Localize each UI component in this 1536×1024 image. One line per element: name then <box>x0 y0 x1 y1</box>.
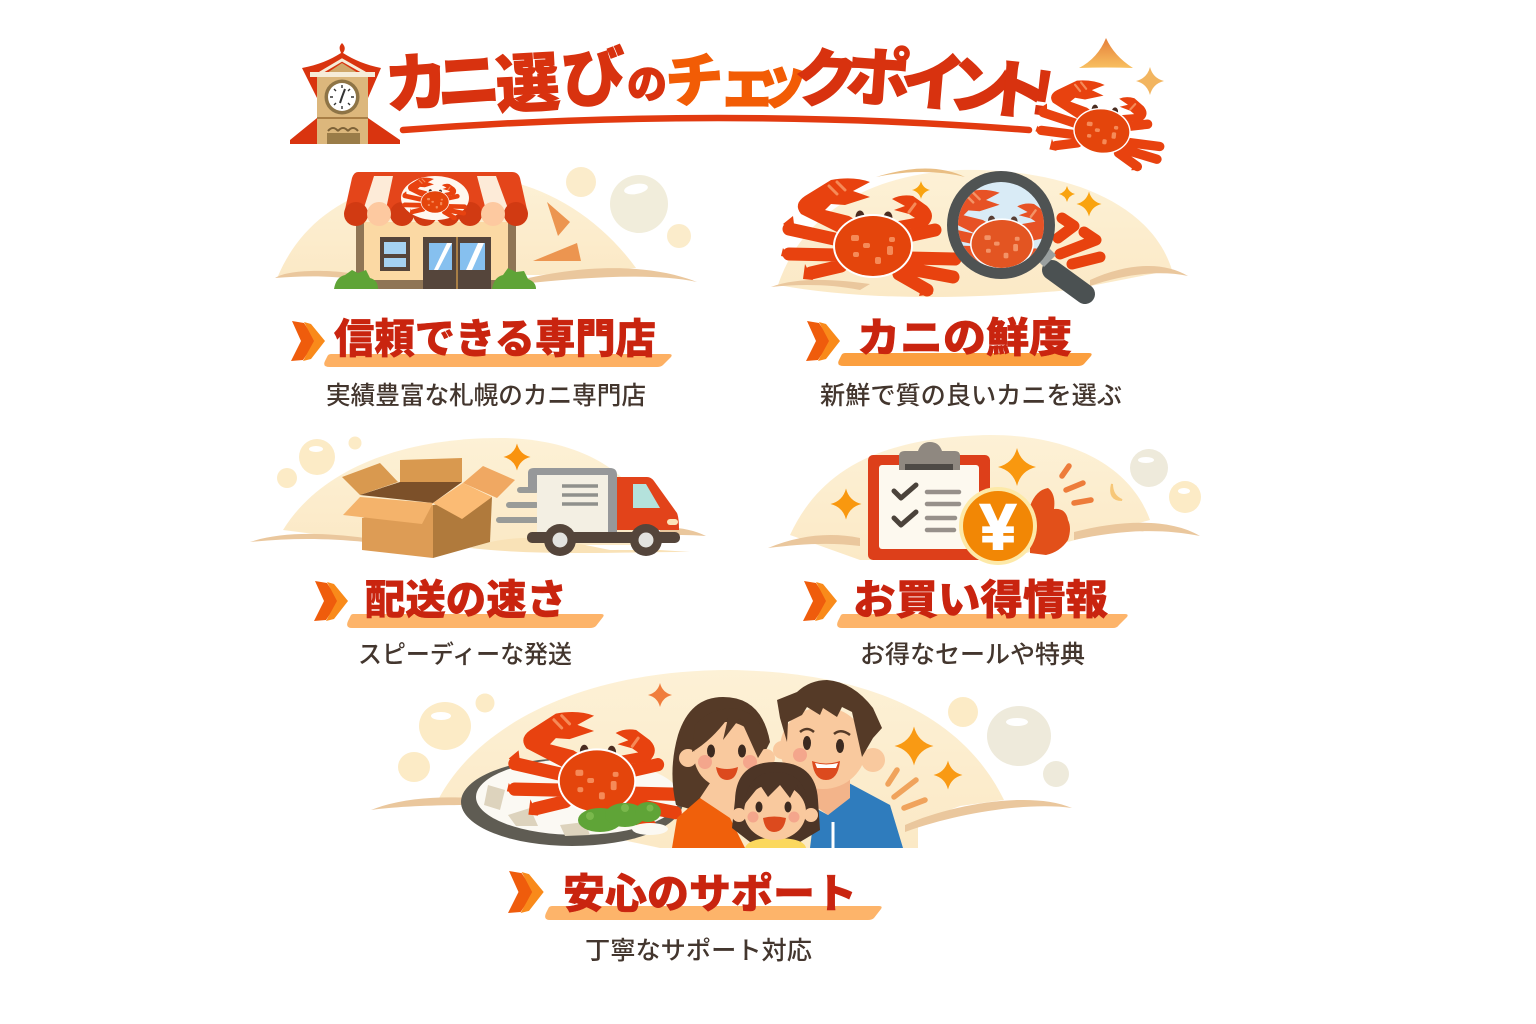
panel: bargain information <box>768 435 1201 669</box>
chevron <box>806 321 840 361</box>
description: 丁寧なサポート対応 <box>585 937 812 965</box>
icon: plate of crab <box>461 712 683 846</box>
chevron <box>291 321 325 361</box>
icon: yen coin <box>959 487 1037 565</box>
icon: truck <box>527 468 680 556</box>
icon: bubbles <box>1130 449 1201 513</box>
description: 新鮮で質の良いカニを選ぶ <box>820 382 1122 410</box>
title text: カニ選び <box>382 41 628 122</box>
heading: 信頼できる専門店 <box>334 316 656 362</box>
description: スピーディーな発送 <box>358 640 572 669</box>
icon: open box <box>342 458 515 558</box>
icon: bubbles and shards <box>533 167 691 261</box>
title text: チェッ <box>663 47 810 117</box>
icon: title crab <box>1032 76 1166 173</box>
background hill <box>768 435 1200 560</box>
heading: 配送の速さ <box>365 577 567 623</box>
panel: reliable support <box>371 670 1072 965</box>
child <box>732 762 820 848</box>
icon: family <box>672 680 903 848</box>
icon: shop <box>334 172 536 289</box>
icon: sparkles <box>830 448 1036 520</box>
icon: moon <box>1111 484 1122 500</box>
heading: お買い得情報 <box>853 577 1108 623</box>
title text <box>382 40 1058 131</box>
icon: bubbles <box>398 694 1069 787</box>
panel: trusted shop <box>275 167 697 410</box>
heading highlight <box>324 354 672 367</box>
background hill <box>371 670 1072 848</box>
heading: 安心のサポート <box>563 871 857 917</box>
title text: の <box>627 63 667 107</box>
chevron <box>803 581 837 621</box>
background hill <box>275 175 697 284</box>
description: 実績豊富な札幌のカニ専門店 <box>326 382 646 410</box>
icon: right crab legs <box>1058 218 1100 264</box>
icon: crab claw <box>1030 488 1070 555</box>
icon: sparkle <box>504 444 530 470</box>
chevron <box>508 871 544 913</box>
icon: bubbles <box>277 436 362 488</box>
icon: excitement marks <box>1062 466 1091 503</box>
icon: sparkles <box>912 181 1102 216</box>
panel: delivery speed <box>250 436 706 669</box>
title underline <box>403 118 1029 130</box>
title text: クポイント! <box>792 40 1058 131</box>
title <box>290 38 1166 173</box>
icon: clipboard <box>868 442 990 560</box>
mother <box>672 697 775 848</box>
icon: yen coin: ¥ <box>980 491 1016 563</box>
chevron <box>314 581 348 621</box>
heading highlight <box>837 614 1128 628</box>
icon: speed lines <box>499 490 548 520</box>
icon: sparkles <box>648 683 962 790</box>
description: お得なセールや特典 <box>860 641 1085 669</box>
icon: orange triangle <box>1079 38 1133 68</box>
background hill <box>250 438 706 553</box>
heading: カニの鮮度 <box>857 315 1072 361</box>
heading highlight <box>347 614 604 628</box>
heading highlight <box>838 353 1092 366</box>
icon: clock tower <box>290 43 400 144</box>
background hill <box>771 168 1188 297</box>
panel: crab freshness <box>771 168 1188 410</box>
icon: sparkle <box>1136 67 1164 95</box>
heading highlight <box>545 906 882 920</box>
icon: magnifying glass <box>928 171 1085 294</box>
icon: red crab <box>781 178 955 296</box>
father <box>773 680 903 848</box>
icon: excitement marks <box>888 770 925 808</box>
